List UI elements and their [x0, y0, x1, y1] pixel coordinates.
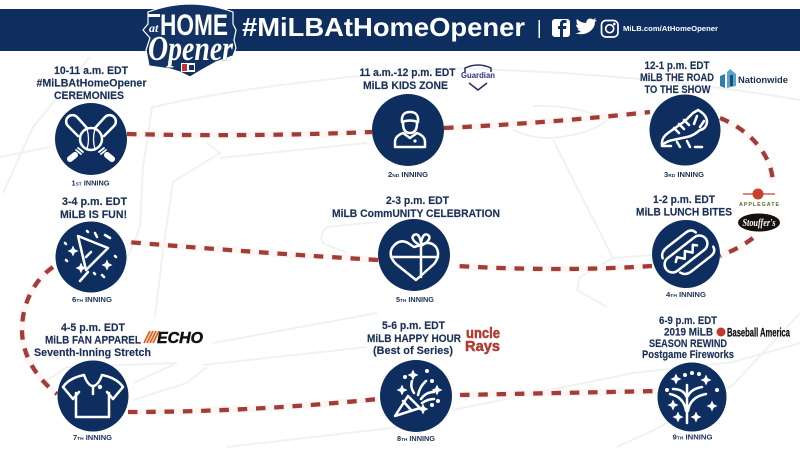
stop 6: MiLB is fun: 6TH INNING [72, 297, 113, 304]
stop 4: lunch bites: 4TH INNING [666, 292, 707, 299]
header banner [0, 9, 800, 51]
logo: Nationwide [720, 69, 788, 88]
divider [538, 20, 540, 38]
stop 1: ceremonies: #MiLBAtHomeOpener [36, 78, 147, 90]
stop 1: ceremonies: CEREMONIES [54, 90, 124, 102]
stop 8: happy hour: 8TH INNING [397, 436, 436, 443]
logo: At Home Opener: Opener [148, 29, 233, 68]
stop 4: lunch bites [636, 194, 732, 299]
stop 3: road to the show [640, 60, 720, 179]
logo: Guardian Protection: Guardian [461, 71, 495, 80]
stop 7: fan apparel: MiLB FAN APPAREL [45, 334, 141, 346]
stop 7: fan apparel: Seventh-Inning Stretch [34, 347, 151, 359]
website link: MiLB.com/AtHomeOpener [623, 26, 718, 33]
logo: Uncle Ray's [465, 325, 500, 355]
stop 5: community celebration: 2-3 p.m. EDT [386, 195, 449, 207]
stop 4: lunch bites: 1-2 p.m. EDT [653, 194, 715, 206]
stop 2: kids zone: 2ND INNING [388, 172, 429, 179]
icon: facebook [552, 19, 570, 37]
stop 9: season rewind: Postgame Fireworks [642, 349, 734, 361]
logo: At Home Opener: HOME [160, 9, 228, 42]
stop 1: ceremonies: 10-11 a.m. EDT [54, 65, 128, 77]
stop 1: ceremonies: 1ST INNING [72, 180, 110, 188]
stop 9: season rewind: 9TH INNING [672, 434, 713, 442]
stop 8: happy hour: MiLB HAPPY HOUR [367, 333, 461, 345]
logo: Stouffer's: Stouffer's [742, 218, 776, 229]
stop 3: road to the show: 3RD INNING [664, 172, 705, 179]
logo: At Home Opener [143, 4, 236, 77]
stop 4: lunch bites: MiLB LUNCH BITES [636, 206, 732, 218]
stop 9: season rewind: 2019 MiLB [664, 326, 713, 338]
stop 9: season rewind: SEASON REWIND [649, 338, 727, 350]
stop 3: road to the show: 12-1 p.m. EDT [644, 60, 710, 72]
stop 1: ceremonies [36, 65, 147, 188]
stop 7: fan apparel: 7TH INNING [73, 435, 113, 442]
stop 2: kids zone [360, 67, 456, 179]
dashed route between innings [22, 112, 773, 412]
stop 2: kids zone: MiLB KIDS ZONE [363, 80, 448, 92]
stop 3: road to the show: MiLB THE ROAD [640, 72, 714, 84]
hashtag headline: #MiLBAtHomeOpener [242, 12, 525, 42]
stop 6: MiLB is fun: 3-4 p.m. EDT [62, 196, 127, 208]
stop 9: season rewind: 6-9 p.m. EDT [659, 315, 717, 327]
stop 7: fan apparel [34, 322, 151, 442]
stop 9: season rewind [642, 315, 734, 442]
stop 6: MiLB is fun [56, 196, 127, 304]
stop 3: road to the show: TO THE SHOW [644, 84, 711, 96]
logo: At Home Opener: at [149, 21, 159, 35]
logo: Stouffer's [738, 214, 780, 232]
stop 5: community celebration: 5TH INNING [396, 297, 435, 304]
logo: ECHO: ECHO [157, 330, 204, 347]
stop 5: community celebration [332, 195, 500, 304]
logo: Uncle Ray's: Rays [465, 338, 500, 355]
stop 8: happy hour: 5-6 p.m. EDT [382, 320, 445, 332]
stop 7: fan apparel: 4-5 p.m. EDT [61, 322, 125, 334]
icon: instagram [602, 20, 618, 37]
stop 8: happy hour: (Best of Series) [373, 345, 453, 357]
stop 8: happy hour [367, 320, 461, 443]
logo: Applegate: APPLEGATE [739, 202, 780, 208]
logo: Applegate [739, 188, 780, 208]
stop 6: MiLB is fun: MiLB IS FUN! [60, 209, 127, 221]
logo: Uncle Ray's: uncle [466, 325, 500, 342]
icon: twitter [575, 18, 597, 34]
stop 5: community celebration: MiLB CommUNITY CELEBRATION [332, 208, 500, 220]
logo: Guardian Protection [461, 65, 495, 90]
logo: Nationwide: Nationwide [738, 75, 788, 86]
stop 2: kids zone: 11 a.m.-12 p.m. EDT [360, 67, 456, 79]
